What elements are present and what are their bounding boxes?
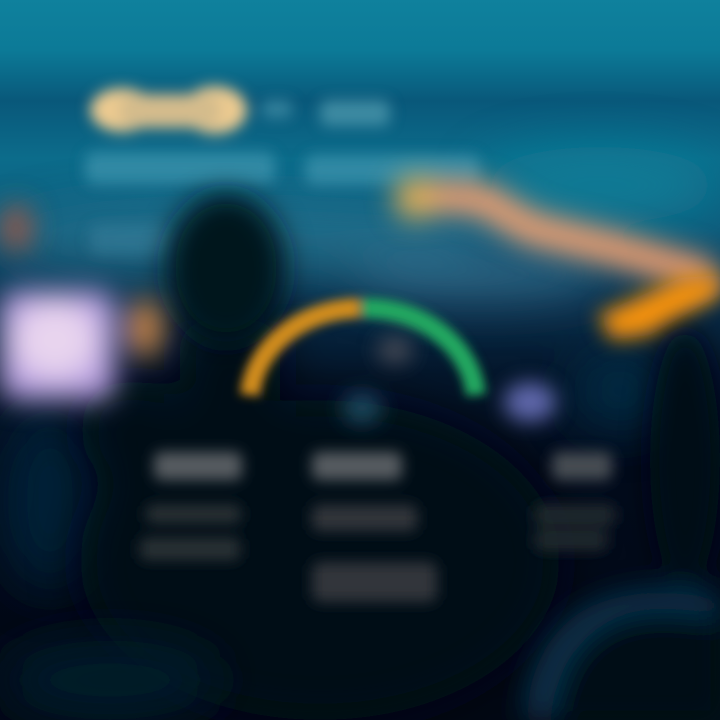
title line 1 remainder (262, 100, 292, 118)
gauge centre details (342, 336, 556, 424)
orange trend line (395, 176, 702, 274)
column 1 text (140, 452, 242, 560)
background haze (0, 147, 718, 590)
orange arrow head (598, 275, 720, 340)
title line 2 (85, 152, 275, 184)
foreground silhouette bottom left (0, 640, 220, 720)
column 2 text (312, 452, 437, 602)
left glowing screen (0, 204, 163, 400)
gauge green segment (362, 308, 476, 395)
title line 1 highlighted (90, 86, 247, 134)
foreground silhouette right (525, 330, 720, 720)
dark silhouette body (80, 320, 560, 720)
gauge orange segment (250, 308, 360, 395)
column 3 text (535, 452, 615, 550)
gauge arc (250, 308, 476, 395)
subtitle (90, 225, 170, 255)
title text blocks (85, 86, 480, 255)
silhouette head (166, 193, 286, 343)
